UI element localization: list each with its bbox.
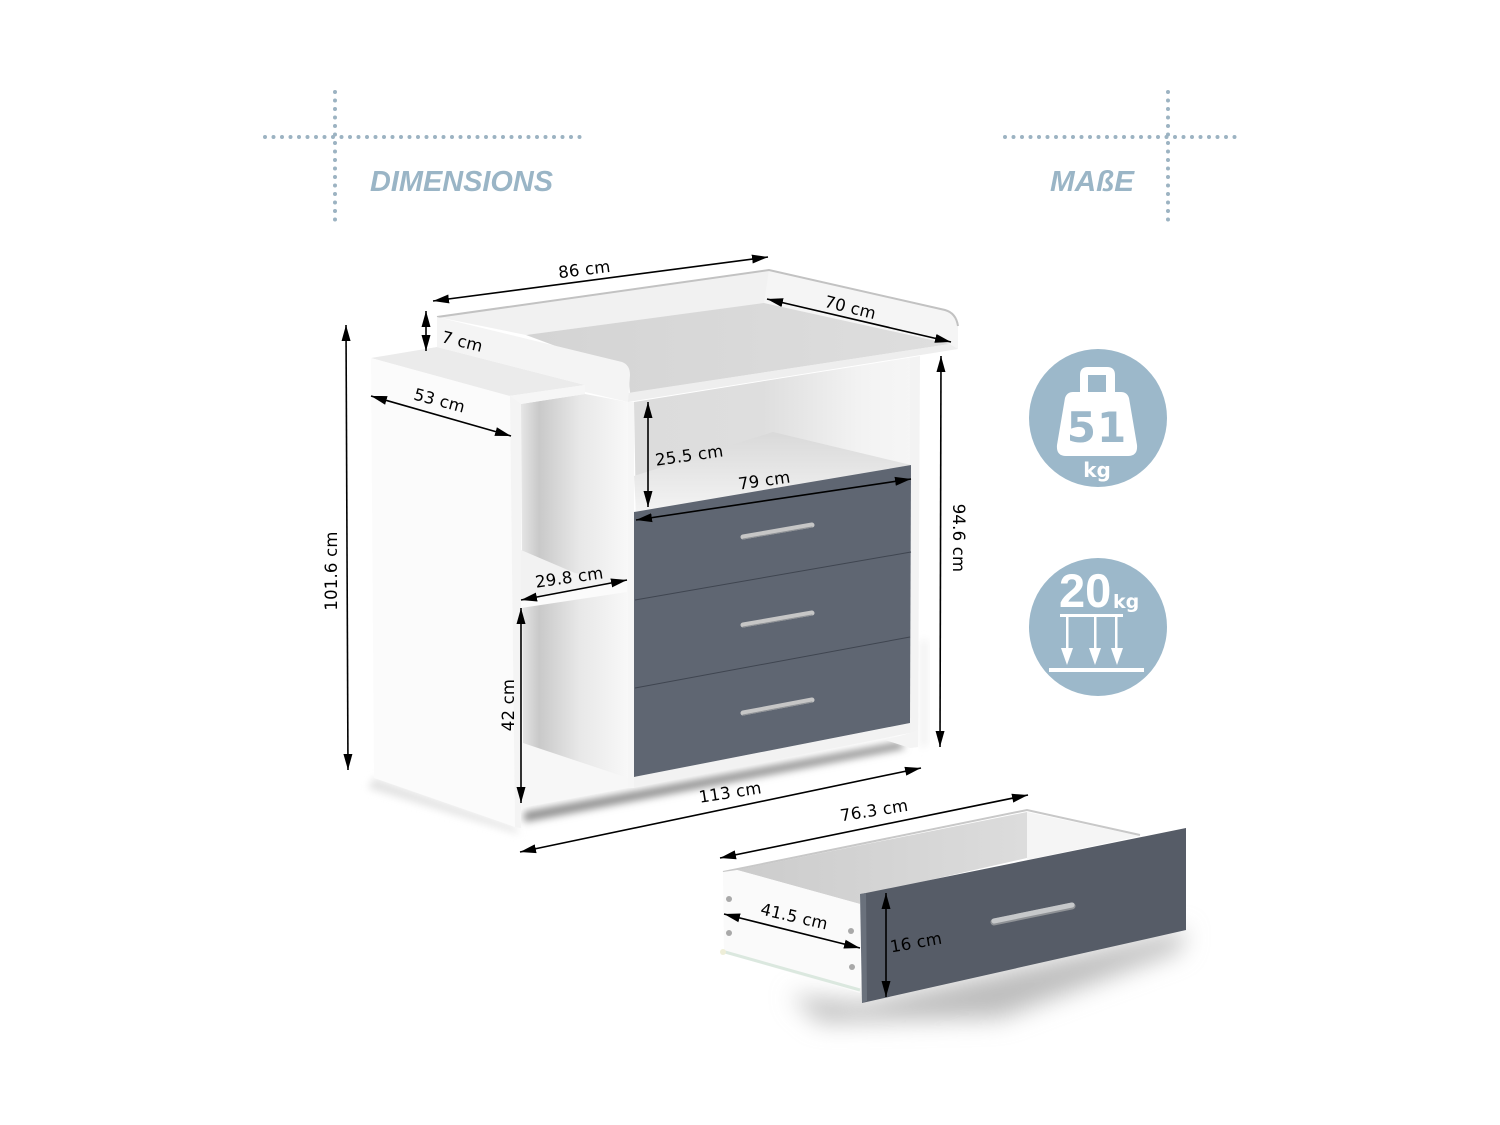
dimension 42 cm: 42 cm: [499, 679, 518, 731]
drawer top edge: [723, 810, 1140, 872]
title Masse: MAßE: [1050, 166, 1136, 198]
upper shelf: [634, 432, 911, 513]
left unit top: [371, 347, 585, 396]
dimension 70 cm: 70 cm: [823, 292, 878, 323]
dimension 16 cm: [886, 893, 943, 997]
drawer fronts: [634, 465, 911, 777]
right side panel: [910, 356, 920, 748]
dimension 86 cm: [433, 257, 768, 301]
dimension 79 cm: 79 cm: [737, 468, 791, 494]
cabinet floor shadow: [368, 640, 928, 834]
drawer inner back panels: [737, 812, 1027, 904]
dotted cross right: [1005, 92, 1236, 221]
dimension 53 cm: [371, 385, 511, 436]
left side panel: [371, 358, 515, 827]
dimension 29.8 cm: [521, 563, 627, 600]
changing top back rail: [437, 270, 769, 335]
icon: shelf load 20 kg: [1029, 558, 1167, 696]
middle shelf: [521, 550, 627, 608]
right foot: [885, 730, 918, 748]
dimension 25.5 cm: [648, 402, 724, 507]
drawer front left edge: [860, 893, 867, 1003]
dimension 70 cm: [767, 292, 951, 342]
dimension 41.5 cm: 41.5 cm: [759, 900, 830, 934]
compartment floor: [521, 743, 628, 808]
left compartments back wall: [521, 394, 628, 780]
changing surface: [526, 303, 950, 393]
drawer screws: [726, 896, 855, 970]
load unit: kg: [1113, 591, 1139, 613]
weight unit: kg: [1083, 458, 1111, 482]
changing top right guard: [764, 270, 958, 349]
dimension 25.5 cm: 25.5 cm: [654, 441, 724, 470]
dimension 7 cm: [426, 311, 485, 356]
drawer slide rail: [720, 949, 860, 990]
dimension 53 cm: 53 cm: [412, 385, 467, 417]
drawer handles: [743, 525, 812, 715]
icon: product weight 51 kg: [1029, 349, 1167, 487]
drawer right inner panel: [1027, 812, 1140, 860]
plinth board: [634, 723, 911, 788]
changing top front edge: [628, 344, 958, 402]
dimension 79 cm: [636, 468, 911, 520]
cabinet: [368, 270, 958, 834]
upper open compartment back wall: [634, 356, 920, 515]
load number: 20: [1059, 564, 1111, 617]
dotted cross left: [265, 92, 580, 221]
load arrows: [1049, 614, 1144, 672]
drawer front: [861, 828, 1186, 1003]
weight number: 51: [1067, 403, 1127, 452]
dimension 113 cm: [520, 768, 921, 852]
dimension 101.6 cm: 101.6 cm: [322, 531, 341, 611]
left unit top edge: [509, 385, 585, 404]
dimension 113 cm: 113 cm: [697, 778, 763, 807]
drawer shadow: [790, 930, 1186, 1022]
left unit front edge: [510, 396, 521, 828]
dimension 41.5 cm: [724, 900, 860, 948]
dimension 7 cm: 7 cm: [440, 327, 485, 356]
dimension 76.3 cm: [720, 795, 1028, 858]
title DIMENSIONS: DIMENSIONS: [370, 166, 554, 198]
dimension 76.3 cm: 76.3 cm: [839, 796, 909, 825]
dimension 94.6 cm: 94.6 cm: [949, 504, 968, 572]
dimension 86 cm: 86 cm: [557, 257, 611, 282]
drawer handle: [994, 905, 1072, 922]
drawer side panel: [723, 870, 860, 993]
dimension 16 cm: 16 cm: [889, 929, 943, 956]
changing top left rail: [437, 317, 630, 402]
rail top edge: [437, 270, 958, 326]
weight shape: [1057, 367, 1137, 456]
dimension 29.8 cm: 29.8 cm: [534, 563, 604, 592]
divider panel: [628, 402, 634, 788]
open drawer: [720, 810, 1186, 1022]
